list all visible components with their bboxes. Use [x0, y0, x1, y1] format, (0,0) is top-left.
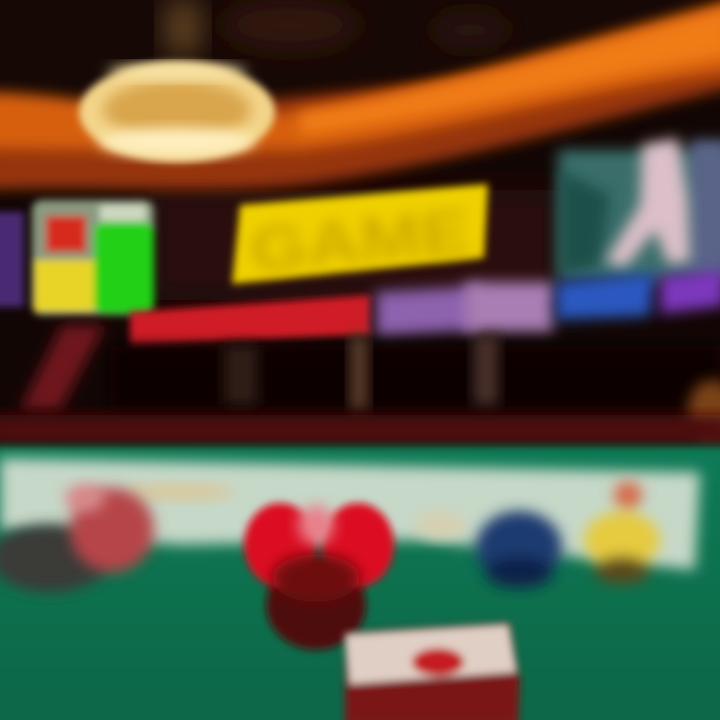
- coloured seat row: [130, 268, 720, 346]
- left purple board: [0, 212, 24, 307]
- red and white box: [345, 622, 520, 720]
- left coloured board: [32, 200, 154, 315]
- red chip cluster: [244, 503, 394, 650]
- left chip stacks: [0, 484, 154, 592]
- blue chip stack: [476, 511, 562, 588]
- yellow chip stack: [584, 481, 660, 584]
- chandelier: [79, 0, 275, 162]
- dark seating band: [20, 325, 720, 440]
- white betting strip: [0, 458, 700, 570]
- red table rail: [0, 415, 720, 445]
- right screen with figure: [558, 138, 720, 280]
- green table felt: [0, 446, 720, 720]
- sign lettering: GAME: [248, 198, 473, 285]
- orange ceiling band: [0, 0, 720, 190]
- yellow game sign: [232, 184, 488, 285]
